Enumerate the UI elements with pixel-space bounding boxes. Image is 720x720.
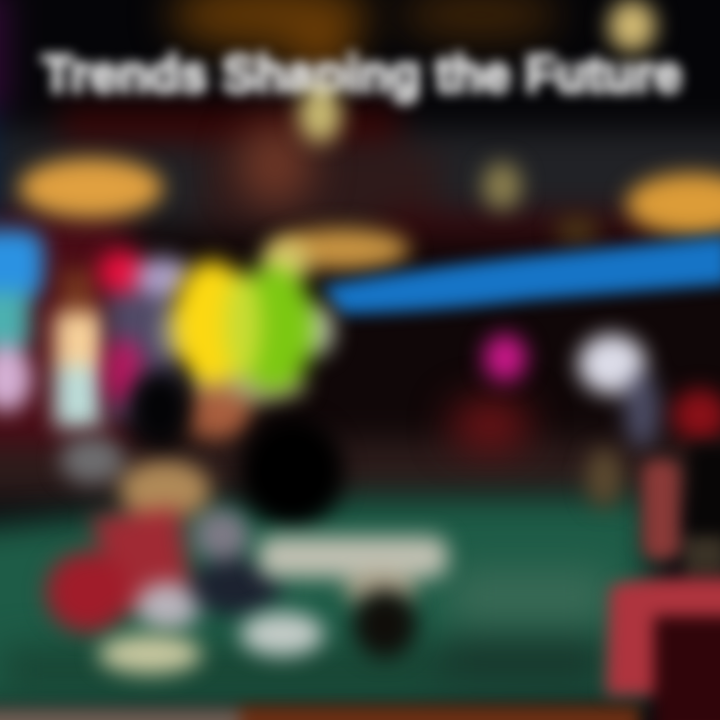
golden oval lamp centre — [274, 228, 410, 270]
magenta and white lights right — [483, 334, 720, 508]
golden oval lamp left — [19, 158, 163, 218]
white and teal slot machine — [54, 270, 104, 428]
dark figure — [128, 370, 344, 526]
left blue and teal screen — [0, 230, 44, 412]
golden oval lamp right — [626, 173, 720, 235]
red chair right — [606, 445, 720, 720]
title: Trends Shaping the Future — [42, 45, 682, 104]
table edge — [0, 706, 640, 720]
blue banner — [322, 236, 720, 314]
purple and crimson slot machine — [98, 250, 191, 420]
yellow and green slot machine — [161, 240, 334, 440]
ceiling lights — [298, 0, 656, 244]
chips on table — [98, 590, 417, 674]
seated player left — [46, 436, 281, 632]
felt shading — [0, 570, 610, 690]
white cards on table — [258, 536, 448, 608]
casino table felt — [0, 496, 650, 710]
